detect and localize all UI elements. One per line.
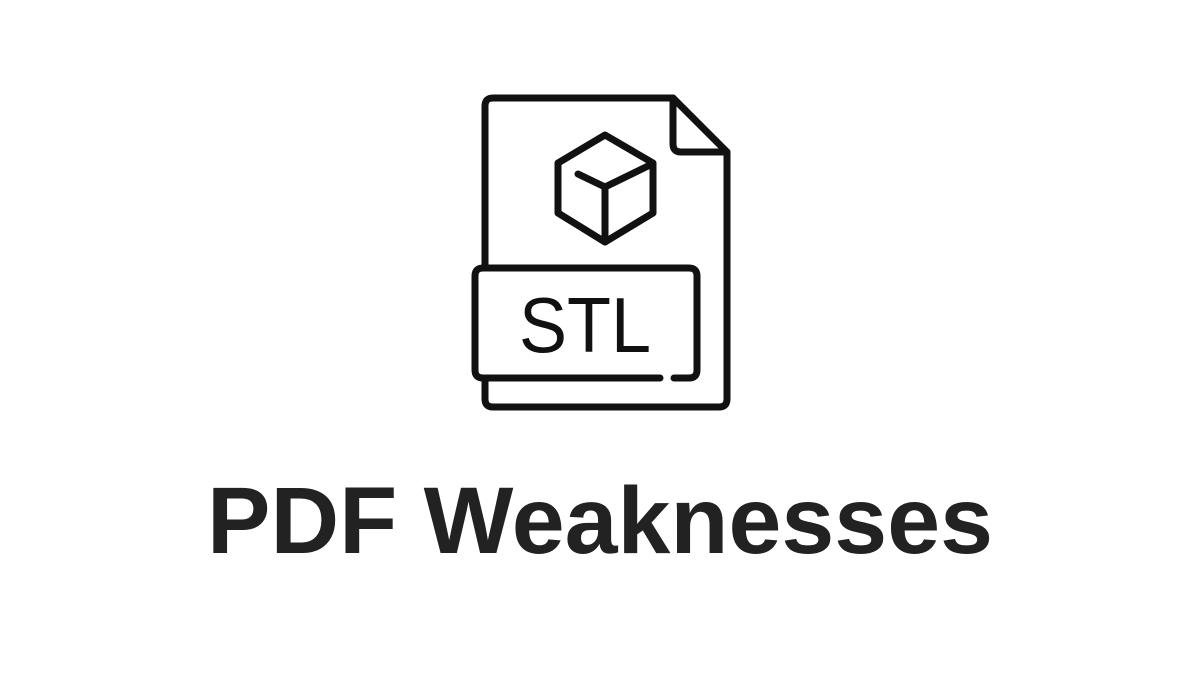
icon text: STL: STL <box>519 281 651 369</box>
icon: cube <box>558 135 653 242</box>
title: PDF Weaknesses <box>207 468 993 574</box>
icon: page outline with folded corner <box>485 98 727 407</box>
icon: STL file <box>475 98 727 407</box>
icon: STL label box <box>475 268 697 378</box>
